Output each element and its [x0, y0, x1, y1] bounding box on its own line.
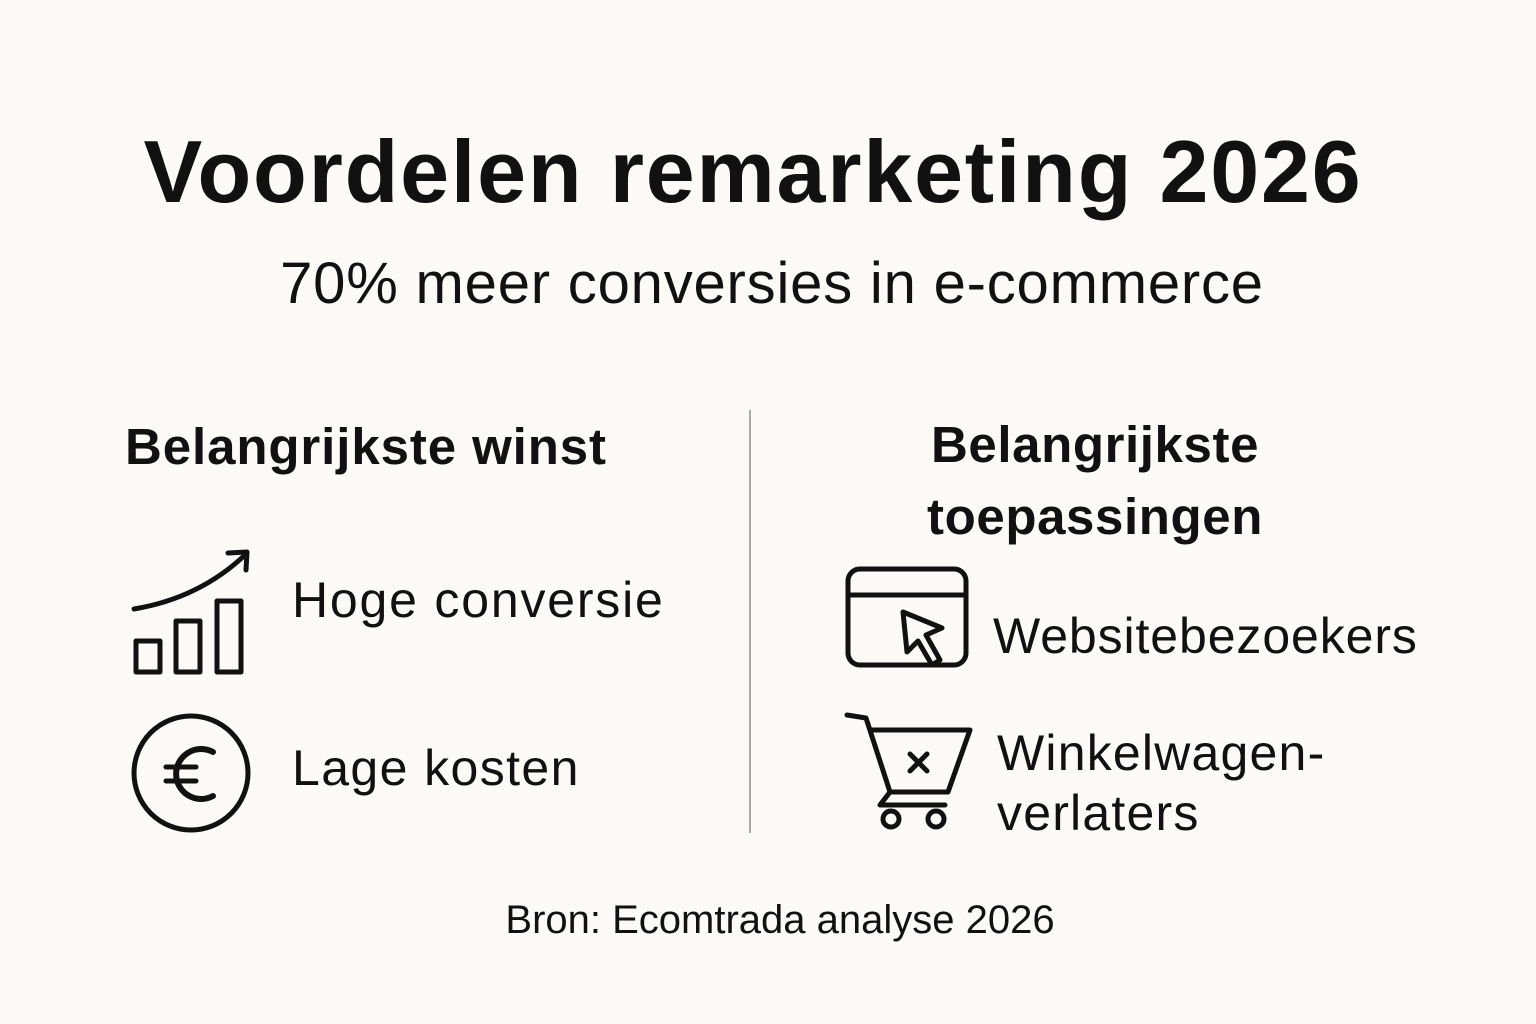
item: lage kosten: Lage kosten — [292, 740, 580, 796]
heading: belangrijkste toepassingen — [927, 416, 1263, 545]
heading: belangrijkste toepassingen: toepassingen — [927, 488, 1263, 545]
heading: belangrijkste winst: Belangrijkste winst — [125, 418, 607, 475]
item: websitebezoekers: Websitebezoekers — [993, 608, 1418, 664]
icon: euro — [134, 716, 248, 830]
item: winkelwagenverlaters: Winkelwagen- — [997, 725, 1325, 781]
icon: chart — [134, 552, 247, 672]
source: Bron: Ecomtrada analyse 2026 — [505, 898, 1055, 942]
heading: belangrijkste toepassingen: Belangrijkste — [931, 416, 1259, 473]
icon: browser cursor — [848, 569, 966, 665]
title: Voordelen remarketing 2026 — [144, 122, 1362, 221]
item: winkelwagenverlaters — [997, 725, 1325, 841]
icon: cart — [847, 715, 970, 827]
divider — [749, 410, 751, 833]
item: hoge conversie: Hoge conversie — [292, 572, 665, 628]
subtitle: 70% meer conversies in e-commerce — [280, 251, 1264, 316]
item: winkelwagenverlaters: verlaters — [997, 785, 1200, 841]
